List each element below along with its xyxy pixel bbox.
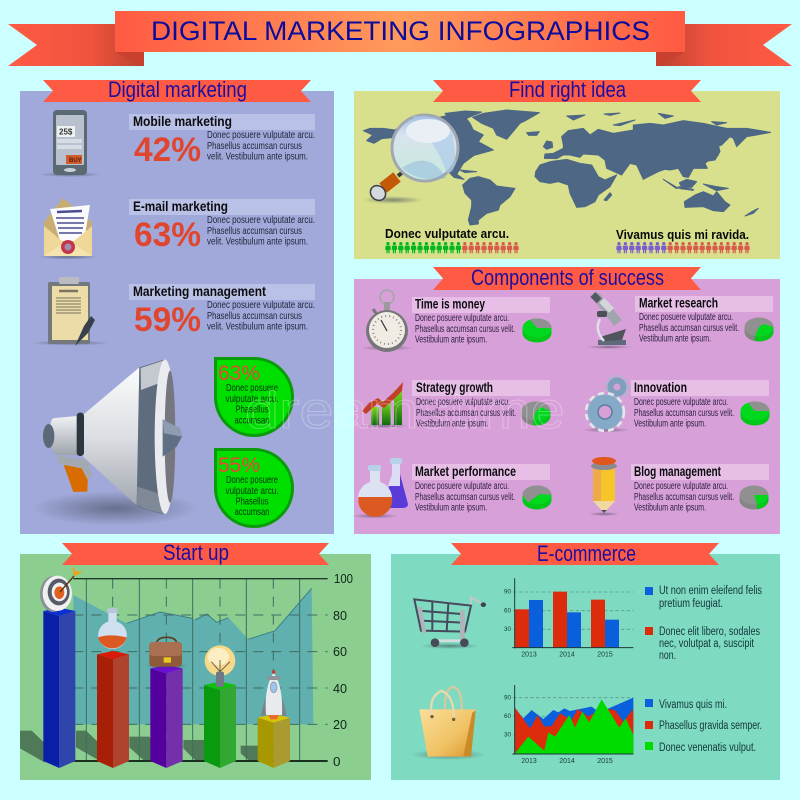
text block: mobile marketing: Phasellus accumsan cursus — [207, 140, 302, 152]
icon: magnifying glass — [363, 115, 458, 204]
area and bar chart — [20, 566, 328, 768]
text block: innovation — [631, 379, 769, 430]
area chart: yearly — [504, 685, 633, 765]
heading ribbon: e-commerce: E-commerce — [537, 541, 636, 566]
icon: target with arrow — [40, 566, 83, 612]
callout: 63% badge: accumsan — [234, 414, 270, 426]
icon: growth chart — [361, 382, 409, 428]
bar: purple — [150, 665, 183, 768]
heading ribbon: e-commerce — [451, 541, 719, 566]
heading ribbon: digital marketing — [43, 77, 311, 102]
icon: light bulb — [205, 645, 235, 687]
legend: area chart: Phasellus gravida semper. — [659, 720, 762, 732]
pie: innovation — [740, 402, 770, 426]
area chart: yearly: 30 — [504, 732, 512, 739]
pie: blog management — [740, 486, 768, 510]
text block: time is money: Donec posuere vulputate arcu. — [415, 313, 509, 324]
legend: bar chart: non. — [659, 650, 676, 662]
axis labels — [333, 571, 353, 769]
text block: market performance: Vestibulum ante ipsum. — [415, 502, 487, 514]
icon: smartphone: 25$ — [59, 128, 73, 136]
text block: mobile marketing: velit. Vestibulum ante ipsum. — [207, 150, 308, 162]
axis labels: 100 — [334, 571, 353, 586]
callout: 63% badge: 63% — [218, 362, 260, 385]
area chart: yearly: 90 — [504, 694, 512, 701]
legend: bar chart: Ut non enim eleifend felis — [659, 585, 762, 597]
icon: rocket — [261, 670, 287, 719]
callout: 63% badge: Phasellus — [236, 404, 268, 416]
text block: time is money: Time is money — [415, 296, 485, 312]
bar: yellow — [258, 714, 290, 768]
watermark: dreamstime — [245, 382, 565, 440]
legend: bar chart: nec, volutpat a, suscipit — [659, 638, 755, 650]
text block: blog management — [631, 463, 769, 514]
text block: strategy growth — [412, 379, 550, 430]
callout: 55% badge: 55% — [218, 454, 260, 477]
text block: marketing management: Marketing management — [133, 283, 266, 299]
heading ribbon: digital marketing: Digital marketing — [108, 77, 247, 102]
legend: bar chart — [645, 585, 762, 662]
axis labels: 40 — [333, 681, 347, 696]
axis labels: 20 — [333, 717, 347, 732]
bar chart: yearly: 60 — [504, 607, 512, 614]
panel: find right idea — [354, 77, 780, 259]
callout: 55% badge — [216, 450, 292, 526]
text block: strategy growth: Vestibulum ante ipsum. — [416, 418, 488, 430]
text block: blog management: Vestibulum ante ipsum. — [634, 502, 706, 514]
text block: e-mail marketing — [129, 198, 315, 254]
heading ribbon: find right idea — [433, 77, 701, 102]
text block: market research: Donec posuere vulputate arcu. — [639, 312, 733, 323]
heading ribbon: components of success: Components of success — [471, 265, 664, 290]
title banner — [8, 11, 792, 66]
icon: shopping bag — [411, 687, 486, 760]
text block: marketing management: velit. Vestibulum ante ipsum. — [207, 320, 308, 332]
bar chart: yearly — [504, 578, 633, 659]
text block: market performance: Phasellus accumsan cursus velit. — [415, 492, 515, 503]
pie: strategy growth — [522, 402, 550, 426]
text block: marketing management: 59% — [134, 301, 201, 339]
icon: smartphone: BUY — [69, 158, 82, 164]
icon: gears — [582, 376, 630, 432]
text block: market performance — [412, 463, 550, 514]
axis labels: 60 — [333, 644, 347, 659]
legend: bar chart: pretium feugiat. — [659, 598, 723, 610]
axis labels: 0 — [333, 754, 340, 769]
heading ribbon: start up — [62, 540, 329, 565]
text block: blog management: Blog management — [634, 463, 721, 479]
area chart: yearly: 60 — [504, 713, 512, 720]
text block: e-mail marketing: velit. Vestibulum ante ipsum. — [207, 236, 308, 248]
text block: e-mail marketing: 63% — [134, 216, 201, 254]
bar chart: yearly: 30 — [504, 626, 512, 633]
text block: e-mail marketing: Donec posuere vulputate arcu. — [207, 214, 315, 226]
text block: market performance: Market performance — [415, 463, 516, 479]
callout: 55% badge: vulputate arcu. — [226, 485, 278, 497]
callout: 63% badge: Donec posuere — [226, 382, 278, 394]
legend: area chart — [645, 699, 762, 754]
text: left statistic: Donec vulputate arcu. — [385, 226, 509, 241]
icon: briefcase — [145, 637, 189, 669]
text block: marketing management: Donec posuere vulputate arcu. — [207, 299, 315, 311]
heading ribbon: find right idea: Find right idea — [509, 77, 627, 102]
text block: mobile marketing: Donec posuere vulputate arcu. — [207, 129, 315, 141]
text block: marketing management — [129, 283, 315, 339]
bar chart: yearly: 2013 — [521, 652, 537, 659]
text block: innovation: Donec posuere vulputate arcu. — [634, 397, 728, 408]
icon: stopwatch — [360, 290, 414, 352]
panel: digital marketing — [20, 77, 334, 534]
legend: bar chart: Donec elit libero, sodales — [659, 626, 760, 638]
icon: microscope — [586, 292, 632, 349]
heading ribbon: start up: Start up — [163, 540, 229, 565]
text block: mobile marketing: 42% — [134, 131, 201, 169]
legend: area chart: Vivamus quis mi. — [659, 699, 727, 711]
axis labels: 80 — [333, 608, 347, 623]
icon: pencil — [588, 457, 620, 516]
text: right statistic: Vivamus quis mi ravida. — [616, 227, 749, 242]
text block: e-mail marketing: E-mail marketing — [133, 198, 228, 214]
text block: strategy growth: Strategy growth — [416, 379, 493, 395]
text block: innovation: Phasellus accumsan cursus velit. — [634, 408, 734, 419]
text: right statistic — [616, 227, 750, 253]
text block: blog management: Donec posuere vulputate arcu. — [634, 481, 728, 492]
bar chart: yearly: 90 — [504, 589, 512, 596]
text block: time is money: Phasellus accumsan cursus velit. — [415, 324, 515, 335]
bar: green — [204, 682, 236, 768]
callout: 55% badge: Donec posuere — [226, 474, 278, 486]
icon: smartphone — [39, 110, 101, 177]
text block: strategy growth: Donec posuere vulputate arcu. — [416, 397, 510, 408]
text block: innovation: Vestibulum ante ipsum. — [634, 418, 706, 430]
bar chart: yearly: 2015 — [597, 652, 613, 659]
pie: time is money — [522, 318, 552, 342]
legend: area chart: Donec venenatis vulput. — [659, 742, 756, 754]
text block: blog management: Phasellus accumsan cursus velit. — [634, 492, 734, 503]
area chart: yearly: 2013 — [521, 758, 537, 765]
title banner: DIGITAL MARKETING INFOGRAPHICS — [151, 16, 650, 46]
callout: 63% badge — [216, 358, 292, 436]
text block: strategy growth: Phasellus accumsan cursus velit. — [416, 408, 516, 419]
panel: start up — [20, 540, 371, 780]
text block: mobile marketing: Mobile marketing — [133, 113, 232, 129]
text block: market research: Phasellus accumsan cursus velit. — [639, 323, 739, 334]
text block: mobile marketing — [129, 113, 315, 169]
callout: 55% badge: accumsan — [234, 506, 270, 518]
icon: chemistry flasks — [351, 458, 408, 518]
pie: market performance — [522, 486, 552, 510]
area chart: yearly: 2014 — [559, 758, 575, 765]
text: left statistic — [385, 226, 519, 253]
panel: e-commerce — [391, 541, 780, 780]
text block: market research — [635, 294, 773, 344]
text block: e-mail marketing: Phasellus accumsan cursus — [207, 225, 302, 237]
icon: shopping cart — [414, 597, 486, 649]
icon: round flask — [98, 608, 127, 649]
text block: marketing management: Phasellus accumsan cursus — [207, 310, 302, 322]
panel: components of success — [351, 265, 780, 534]
icon: clipboard and pen — [30, 277, 110, 346]
text block: market performance: Donec posuere vulputate arcu. — [415, 481, 509, 492]
text block: innovation: Innovation — [634, 379, 687, 395]
text block: time is money: Vestibulum ante ipsum. — [415, 334, 487, 346]
callout: 63% badge: vulputate arcu. — [226, 393, 278, 405]
callout: 55% badge: Phasellus — [236, 496, 268, 508]
icon: megaphone — [32, 359, 198, 526]
bar: blue — [43, 608, 75, 768]
text block: time is money — [412, 296, 550, 346]
icon: envelope — [37, 198, 99, 260]
pie: market research — [744, 318, 774, 342]
bar: red — [97, 651, 129, 768]
text block: market research: Vestibulum ante ipsum. — [639, 334, 711, 344]
bar chart: yearly: 2014 — [559, 652, 575, 659]
text block: market research: Market research — [639, 294, 718, 310]
world map — [363, 110, 771, 225]
area chart: yearly: 2015 — [597, 758, 613, 765]
